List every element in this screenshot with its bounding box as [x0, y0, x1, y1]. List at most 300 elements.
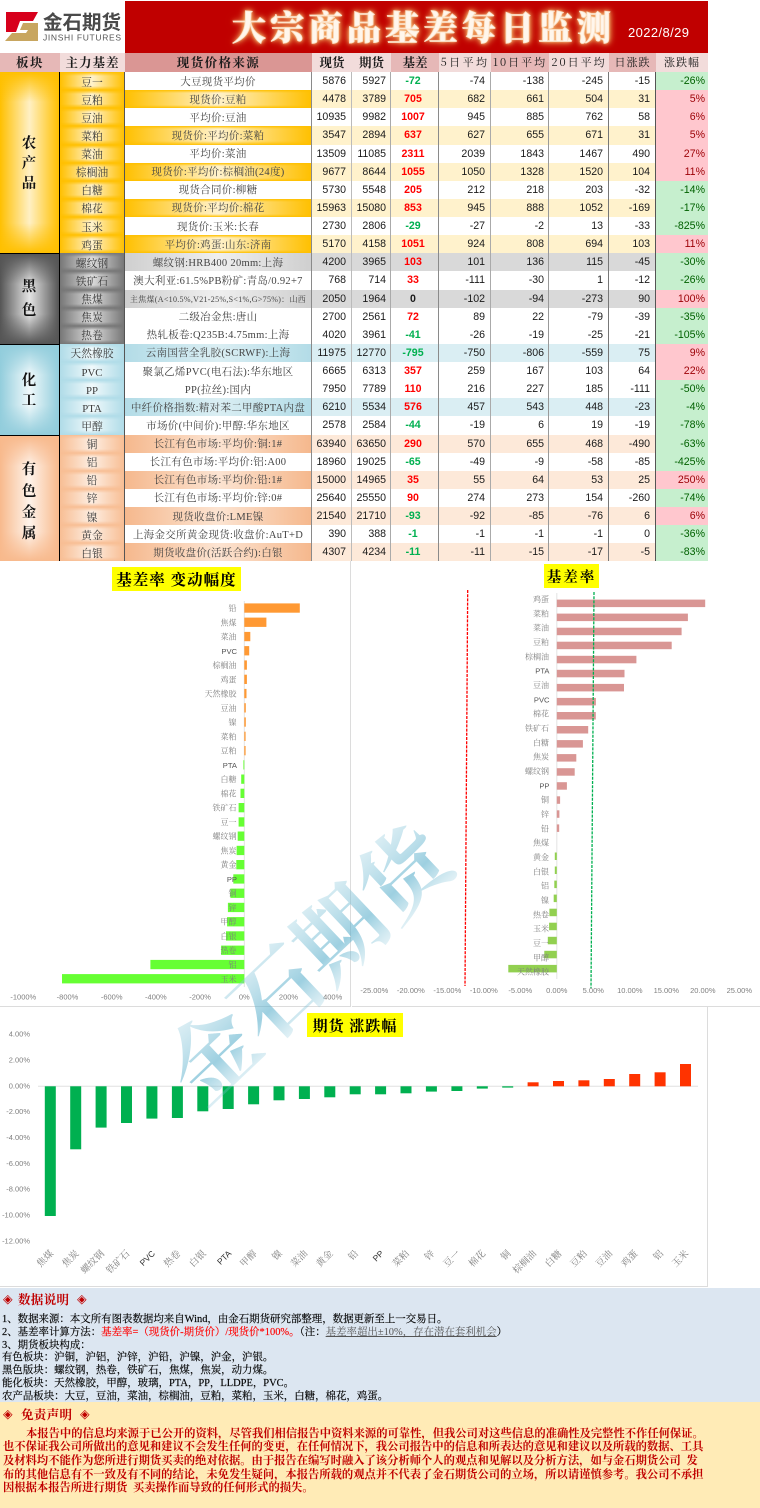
- row: 白银: -15: [529, 546, 544, 558]
- row: 菜油: 平均价:菜油: [189, 149, 247, 160]
- row: 白糖: [60, 181, 708, 199]
- panel: data notes: [0, 1288, 760, 1402]
- row: 铜: -63%: [680, 438, 705, 450]
- heading: disclaimer: 免责声明: [21, 1404, 72, 1423]
- date: 2022/8/29: [628, 25, 689, 40]
- row: 铁矿石: -26%: [680, 274, 705, 286]
- rotated category labels: PP: [371, 1248, 386, 1263]
- row: 铝: -49: [470, 456, 485, 468]
- row: 黄金: [60, 525, 708, 543]
- row: PP: 216: [467, 383, 485, 395]
- row: 铅: [60, 471, 708, 489]
- panel: basis rate chart: [352, 561, 760, 1007]
- category labels: 白银: [533, 866, 549, 876]
- heading: data notes: ◈: [3, 1291, 13, 1306]
- row: 玉米: 2806: [362, 220, 386, 232]
- row: PTA: 5534: [362, 401, 386, 413]
- row: 铅: 25: [638, 474, 650, 486]
- row: 焦炭: 焦炭: [81, 312, 103, 324]
- x axis ticks: 0%: [239, 992, 250, 1002]
- row: 热卷: -21: [635, 329, 650, 341]
- row: PP: 7789: [362, 383, 386, 395]
- category labels: 铁矿石: [525, 723, 549, 733]
- row: 天然橡胶: 11975: [317, 347, 346, 359]
- category labels: PTA: [223, 761, 238, 770]
- row: 豆一: -74: [470, 75, 485, 87]
- rotated category labels: 热卷: [161, 1247, 184, 1270]
- row: PTA: [60, 398, 708, 416]
- row: 铅: 64: [532, 474, 544, 486]
- table header row: [0, 53, 708, 72]
- sector: 化工: 化: [22, 369, 36, 390]
- sector: 有色金属: 金: [22, 501, 36, 522]
- row: 黄金: -1: [535, 528, 544, 540]
- x axis ticks: -400%: [145, 992, 167, 1002]
- heading: disclaimer: ◈: [3, 1406, 13, 1421]
- x axis ticks: -600%: [101, 992, 123, 1002]
- text block: notes lines: 1、数据来源：本文所有图表数据均来自Wind，由金石期货研究部整理，数据更新至上一交易日。: [2, 1314, 448, 1325]
- row: 棉花: [60, 199, 708, 217]
- row: 甲醇: [60, 416, 708, 435]
- heading: data notes: [3, 1289, 87, 1308]
- row: 甲醇: -78%: [680, 419, 705, 431]
- category labels: 玉米: [220, 974, 236, 984]
- row: 螺纹钢: 4200: [322, 256, 346, 268]
- x axis ticks: 20.00%: [690, 986, 716, 995]
- sector: 农产品: 品: [22, 172, 36, 193]
- rotated category labels: 铜: [498, 1247, 514, 1263]
- row: 焦煤: 焦煤: [81, 294, 103, 306]
- logo: Jinshi Futures: [0, 0, 125, 53]
- x axis ticks: -800%: [57, 992, 79, 1002]
- row: 热卷: -41: [405, 329, 421, 341]
- row: 棕榈油: 9677: [322, 166, 346, 178]
- row: 黄金: -1: [594, 528, 603, 540]
- row: 菜粕: 菜粕: [81, 131, 103, 143]
- row: 甲醇: -19: [635, 419, 650, 431]
- category labels: 棕榈油: [212, 660, 236, 670]
- row: 黄金: 388: [368, 528, 386, 540]
- category labels: PP: [227, 875, 237, 884]
- row: 白糖: -14%: [680, 184, 705, 196]
- row: 黄金: -1: [408, 528, 418, 540]
- row: 菜粕: 5%: [690, 129, 705, 141]
- row: 豆粕: 4478: [322, 93, 346, 105]
- red threshold line: [465, 590, 468, 986]
- row: 锌: 25640: [317, 492, 346, 504]
- category labels: PVC: [534, 695, 550, 704]
- row: 豆一: -138: [523, 75, 544, 87]
- text block: notes lines: 2、基差率计算方法：基差率=（现货价-期货价）/现货价*100%。（注：基差率超出±10%，存在潜在套利机会）: [2, 1327, 507, 1338]
- row: 白银: 期货收盘价(活跃合约):白银: [153, 548, 283, 559]
- row: 锌: [60, 489, 708, 507]
- rotated category labels: 棉花: [466, 1247, 488, 1270]
- rotated category labels: 白糖: [542, 1247, 565, 1270]
- x axis ticks: -5.00%: [508, 986, 533, 995]
- y axis ticks: 4.00%: [9, 1030, 30, 1038]
- row: 白银: -11: [406, 546, 420, 558]
- row: 豆一: -245: [582, 75, 603, 87]
- category labels: 天然橡胶: [204, 689, 237, 699]
- row: PTA: 中纤价格指数:精对苯二甲酸PTA内盘: [131, 403, 305, 414]
- row: 焦煤: 100%: [678, 292, 705, 304]
- heading: disclaimer: ◈: [80, 1406, 90, 1421]
- y axis ticks: -6.00%: [6, 1159, 30, 1168]
- chart: futures change bars: [2, 1030, 698, 1276]
- row: 棕榈油: [60, 163, 708, 181]
- rotated category labels: 铁矿石: [104, 1247, 133, 1276]
- row: 焦炭: 2700: [322, 311, 346, 323]
- panel: disclaimer: [0, 1402, 760, 1508]
- row: 镍: 6%: [690, 510, 705, 522]
- row: 螺纹钢: 螺纹钢:HRB400 20mm:上海: [153, 258, 283, 269]
- row: 棉花: 棉花: [81, 203, 103, 215]
- row: 豆粕: 661: [526, 93, 544, 105]
- row: 玉米: -2: [535, 220, 544, 232]
- row: 鸡蛋: [60, 235, 708, 253]
- row: 铜: 468: [585, 438, 603, 450]
- category labels: 菜粕: [533, 608, 549, 618]
- category labels: [517, 594, 550, 977]
- chart title: 期货 涨跌幅: [313, 1014, 397, 1036]
- row: 菜油: 11085: [357, 148, 386, 160]
- row: PP: PP(拉丝):国内: [185, 385, 251, 396]
- rotated category labels: 黄金: [314, 1247, 336, 1270]
- category labels: 铁矿石: [212, 803, 236, 813]
- row: 豆一: 5927: [362, 75, 386, 87]
- row: 鸡蛋: 103: [632, 238, 650, 250]
- row: 热卷: 4020: [322, 329, 346, 341]
- category labels: 棕榈油: [525, 651, 549, 661]
- category labels: 铅: [228, 603, 236, 613]
- y axis ticks: -10.00%: [2, 1210, 30, 1220]
- row: 焦炭: 二级冶金焦:唐山: [179, 312, 257, 323]
- row: 铝: 19025: [357, 456, 386, 468]
- row: 棉花: 853: [404, 202, 422, 214]
- row: 黄金: 黄金: [81, 530, 103, 542]
- row: 白银: -83%: [680, 546, 705, 558]
- x axis ticks: -200%: [189, 992, 211, 1002]
- table header row: 日涨跌: [614, 54, 650, 70]
- row: 铅: 250%: [678, 474, 705, 486]
- table header row: 现货: [319, 53, 344, 71]
- row: 热卷: -105%: [674, 329, 705, 341]
- row: PP: -50%: [680, 383, 705, 395]
- rotated category labels: 焦煤: [34, 1247, 56, 1270]
- row: PVC: 259: [467, 365, 485, 377]
- green threshold line: [591, 592, 594, 988]
- category labels: 白糖: [533, 737, 549, 747]
- row: 白糖: 5730: [322, 184, 346, 196]
- row: 天然橡胶: -806: [523, 347, 544, 359]
- row: 豆粕: 5%: [690, 93, 705, 105]
- category labels: 铜: [541, 795, 549, 805]
- row: PP: PP: [86, 385, 98, 397]
- row: 菜油: 1467: [579, 148, 603, 160]
- row: 豆油: 9982: [362, 111, 386, 123]
- row: 黄金: -1: [476, 528, 485, 540]
- row: PVC: 64: [638, 365, 650, 377]
- category labels: 螺纹钢: [525, 766, 549, 776]
- text block: notes lines: 农产品板块：大豆，豆油，菜油，棕榈油，豆粕，菜粕，玉米，白糖，棉花，鸡蛋。: [2, 1390, 388, 1402]
- row: 螺纹钢: -45: [635, 256, 650, 268]
- row: 天然橡胶: 12770: [357, 347, 386, 359]
- text block: notes lines: 黑色版块：螺纹钢，热卷，铁矿石，焦煤，焦炭，动力煤。: [2, 1365, 273, 1376]
- falling bars: [45, 1086, 513, 1216]
- x axis ticks: 25.00%: [727, 986, 752, 995]
- row: 铅: 15000: [317, 474, 346, 486]
- row: 白糖: 5548: [362, 184, 386, 196]
- row: 铁矿石: -111: [465, 274, 485, 286]
- row: 豆一: 5876: [322, 75, 346, 87]
- row: 锌: 25550: [357, 492, 386, 504]
- x axis ticks: 0.00%: [546, 986, 568, 995]
- row: 玉米: -27: [470, 220, 485, 232]
- heading: data notes: ◈: [77, 1291, 87, 1306]
- rotated category labels: 锌: [422, 1247, 438, 1263]
- rotated category labels: PVC: [138, 1248, 157, 1268]
- text block: disclaimer body: 本报告中的信息均来源于已公开的资料，尽管我们相信报告中资料来源的可靠性，但我公司对这些信息的准确性及完整性不作任何保证。: [26, 1428, 704, 1440]
- row: 锌: 锌: [87, 493, 97, 505]
- row: 铅: 35: [407, 474, 419, 486]
- row: 豆一: [60, 72, 708, 90]
- row: 铁矿石: 33: [407, 274, 419, 286]
- text block: notes lines: 能化板块：天然橡胶，甲醇，玻璃，PTA，PP，LLDPE，PVC。: [2, 1378, 294, 1389]
- row: PTA: -4%: [686, 401, 705, 413]
- row: 白糖: 205: [404, 184, 422, 196]
- category labels: 甲醇: [533, 952, 549, 962]
- row: 铝: -58: [588, 456, 603, 468]
- row: 铝: 18960: [317, 456, 346, 468]
- row: 焦煤: 1964: [362, 292, 386, 304]
- row: 菜粕: 671: [585, 129, 603, 141]
- row: 菜油: 1843: [520, 148, 544, 160]
- category labels: 锌: [541, 809, 549, 819]
- row: PP: 110: [404, 383, 422, 395]
- row: 镍: -76: [588, 510, 603, 522]
- row: 菜粕: 637: [404, 129, 422, 141]
- row: 热卷: 热轧板卷:Q235B:4.75mm:上海: [147, 330, 289, 341]
- sector: 有色金属: [0, 435, 60, 562]
- row: 菜粕: 655: [526, 129, 544, 141]
- row: 甲醇: 6: [538, 419, 544, 431]
- category labels: 豆油: [220, 703, 236, 713]
- row: 天然橡胶: -559: [582, 347, 603, 359]
- table header row: 10日平均: [493, 54, 547, 70]
- row: 螺纹钢: -30%: [680, 256, 705, 268]
- row: PVC: 357: [404, 365, 422, 377]
- row: 锌: -74%: [680, 492, 705, 504]
- row: 豆油: 豆油: [81, 113, 103, 125]
- row: 锌: 154: [585, 492, 603, 504]
- row: 豆油: 885: [526, 111, 544, 123]
- positive bars: [244, 603, 300, 755]
- row: 菜油: 2311: [402, 148, 424, 160]
- category labels: 鸡蛋: [533, 594, 549, 604]
- row: 豆一: -15: [635, 75, 650, 87]
- row: PTA: 448: [585, 401, 603, 413]
- sector: 黑色: [0, 253, 60, 344]
- row: 菜油: 27%: [684, 148, 705, 160]
- y axis ticks: -2.00%: [6, 1107, 30, 1116]
- text block: notes lines: [2, 1313, 507, 1402]
- panel: futures change chart: [0, 1007, 708, 1287]
- row: 天然橡胶: 天然橡胶: [70, 348, 114, 360]
- category labels: 黄金: [220, 860, 236, 870]
- row: 白银: [60, 543, 708, 561]
- row: PTA: PTA: [82, 403, 102, 415]
- row: 豆粕: 31: [638, 93, 650, 105]
- category labels: 白银: [220, 931, 236, 941]
- row: 鸡蛋: 924: [467, 238, 485, 250]
- row: 菜油: 菜油: [81, 149, 103, 161]
- row: 铁矿石: 768: [328, 274, 346, 286]
- category labels: 热卷: [533, 909, 549, 919]
- row: 菜油: 490: [632, 148, 650, 160]
- row: 白糖: 212: [467, 184, 485, 196]
- negative bars: [62, 760, 244, 983]
- row: 焦煤: 90: [638, 292, 650, 304]
- row: 焦煤: -102: [464, 292, 485, 304]
- sector: 黑色: 黑: [22, 275, 36, 296]
- row: 铜: 570: [467, 438, 485, 450]
- row: PP: [60, 380, 708, 398]
- sector: 化工: 工: [22, 389, 36, 410]
- y axis ticks: [2, 1030, 30, 1245]
- row: 焦煤: 2050: [322, 292, 346, 304]
- row: 棉花: 15963: [317, 202, 346, 214]
- category labels: 甲醇: [220, 917, 236, 927]
- y axis ticks: -8.00%: [6, 1185, 30, 1194]
- rotated category labels: 鸡蛋: [619, 1247, 641, 1270]
- x axis ticks: -1000%: [10, 992, 37, 1002]
- category labels: 豆一: [533, 939, 549, 948]
- row: PTA: 6210: [322, 401, 346, 413]
- row: 白糖: -32: [635, 184, 650, 196]
- row: PP: -111: [630, 383, 650, 395]
- text block: disclaimer body: 因根据本报告所进行期货 买卖操作而导致的任何形式的损失。: [3, 1482, 314, 1494]
- rotated category labels: 焦炭: [60, 1247, 82, 1270]
- row: 棉花: -169: [629, 202, 650, 214]
- row: 白糖: 白糖: [81, 185, 103, 197]
- row: PVC: PVC: [81, 366, 102, 378]
- y axis ticks: -12.00%: [2, 1236, 30, 1245]
- row: 棉花: 15080: [357, 202, 386, 214]
- row: 焦煤: -94: [529, 292, 544, 304]
- row: 锌: -260: [629, 492, 650, 504]
- row: 菜粕: 627: [467, 129, 485, 141]
- row: 甲醇: -44: [405, 419, 421, 431]
- row: 豆粕: 682: [467, 93, 485, 105]
- row: 螺纹钢: 螺纹钢: [76, 258, 108, 270]
- row: 棉花: 现货价:平均价:棉花: [172, 203, 264, 214]
- row: 菜油: 2039: [461, 148, 485, 160]
- row: 铜: 655: [526, 438, 544, 450]
- row: PVC: 6665: [322, 365, 346, 377]
- row: 镍: 21710: [357, 510, 386, 522]
- row: 镍: [60, 507, 708, 525]
- row: 豆粕: 705: [404, 93, 422, 105]
- text block: disclaimer body: [3, 1427, 704, 1494]
- row: 鸡蛋: 平均价:鸡蛋:山东:济南: [165, 240, 271, 251]
- watermark: 金石期货: 金石期货: [134, 786, 484, 1127]
- category labels: 豆油: [533, 680, 549, 690]
- row: 铝: -425%: [674, 456, 705, 468]
- category labels: 菜粕: [220, 731, 236, 741]
- row: 豆油: 10935: [317, 111, 346, 123]
- row: 锌: 273: [526, 492, 544, 504]
- row: 螺纹钢: 101: [467, 256, 485, 268]
- row: 黄金: -36%: [680, 528, 705, 540]
- row: PVC: 103: [585, 365, 603, 377]
- row: 甲醇: 2578: [322, 419, 346, 431]
- row: 玉米: -33: [635, 220, 650, 232]
- rotated category labels: 铝: [651, 1247, 666, 1263]
- x axis ticks: -20.00%: [397, 986, 425, 995]
- row: 豆一: 大豆现货平均价: [180, 76, 256, 88]
- row: 铁矿石: -30: [529, 274, 544, 286]
- row: 铁矿石: 铁矿石: [76, 276, 108, 288]
- table header row: 主力基差: [65, 53, 120, 71]
- category labels: 铝: [228, 960, 236, 970]
- row: 铅: 14965: [357, 474, 386, 486]
- row: 焦炭: [60, 308, 708, 326]
- table header row: 基差: [402, 53, 428, 71]
- rotated category labels: PTA: [215, 1248, 234, 1267]
- row: 黄金: 390: [328, 528, 346, 540]
- row: 铜: 290: [404, 438, 422, 450]
- title banner: [125, 1, 708, 53]
- x axis ticks: -15.00%: [433, 986, 462, 995]
- category labels: 棉花: [220, 788, 236, 798]
- row: 菜粕: 3547: [322, 129, 346, 141]
- x axis ticks: 10.00%: [617, 986, 643, 995]
- row: PP: 7950: [322, 383, 346, 395]
- category labels: 豆一: [220, 818, 236, 827]
- row: 棕榈油: 1520: [579, 166, 603, 178]
- logo: Jinshi Futures: JINSHI FUTURES: [43, 32, 121, 42]
- row: 豆油: 762: [585, 111, 603, 123]
- row: 豆油: [60, 108, 708, 126]
- row: 焦炭: -39: [635, 311, 650, 323]
- row: 焦煤: [60, 290, 708, 308]
- x axis ticks: [360, 986, 752, 995]
- sector: 农产品: 产: [22, 152, 36, 173]
- row: 菜粕: [60, 126, 708, 145]
- sector: 有色金属: 色: [22, 480, 36, 501]
- row: 焦炭: 89: [473, 311, 485, 323]
- sector: 有色金属: 有: [22, 458, 36, 479]
- category labels: 黄金: [533, 852, 549, 862]
- row: 白银: 白银: [81, 548, 103, 560]
- category labels: 热卷: [220, 945, 236, 955]
- category labels: 铝: [541, 881, 549, 891]
- chart: basis rate bars: [360, 590, 752, 995]
- y axis ticks: 0.00%: [9, 1081, 30, 1090]
- row: 镍: -85: [529, 510, 544, 522]
- table header row: 现货价格来源: [177, 53, 260, 71]
- row: 铅: 53: [591, 474, 603, 486]
- sector: 农产品: [0, 72, 60, 253]
- row: 螺纹钢: 103: [404, 256, 422, 268]
- sector: 化工: [0, 344, 60, 435]
- row: 菜油: 13509: [317, 148, 346, 160]
- row: 铝: 长江有色市场:平均价:铝:A00: [150, 457, 286, 468]
- rotated category labels: 玉米: [669, 1247, 692, 1270]
- sector: 农产品: 农: [22, 132, 36, 153]
- row: 铜: 长江有色市场:平均价:铜:1#: [154, 439, 282, 450]
- row: 螺纹钢: [60, 253, 708, 271]
